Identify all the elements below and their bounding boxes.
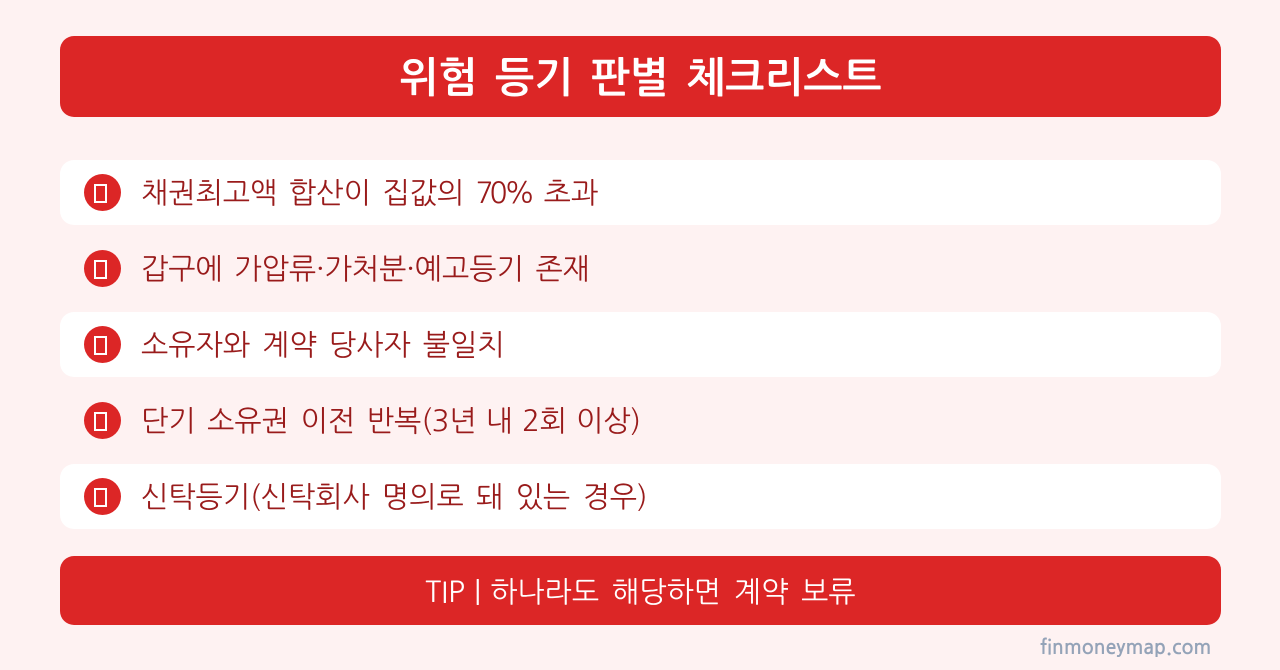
tip banner: TIP | 하나라도 해당하면 계약 보류 bbox=[425, 578, 856, 607]
checklist item 5 bbox=[60, 464, 1221, 529]
tip banner bbox=[60, 556, 1221, 625]
checklist item 1 bbox=[60, 160, 1221, 225]
checklist item 3 bbox=[60, 312, 1221, 377]
title: 위험 등기 판별 체크리스트 bbox=[400, 58, 881, 99]
title bbox=[60, 36, 1221, 117]
icon: item 1 bbox=[84, 174, 121, 211]
icon: item 4 bbox=[84, 402, 121, 439]
icon: item 5 bbox=[84, 478, 121, 515]
checklist item 2 bbox=[84, 250, 590, 287]
item 1 text: 채권최고액 합산이 집값의 70% 초과 bbox=[141, 179, 598, 208]
item 5 text: 신탁등기(신탁회사 명의로 돼 있는 경우) bbox=[141, 483, 648, 512]
checklist item 4 bbox=[84, 402, 641, 439]
footer site name: finmoneymap.com bbox=[1040, 637, 1211, 657]
icon: item 2 bbox=[84, 250, 121, 287]
item 3 text: 소유자와 계약 당사자 불일치 bbox=[141, 331, 504, 360]
icon: item 3 bbox=[84, 326, 121, 363]
item 2 text: 갑구에 가압류·가처분·예고등기 존재 bbox=[141, 255, 590, 284]
item 4 text: 단기 소유권 이전 반복(3년 내 2회 이상) bbox=[141, 407, 641, 436]
